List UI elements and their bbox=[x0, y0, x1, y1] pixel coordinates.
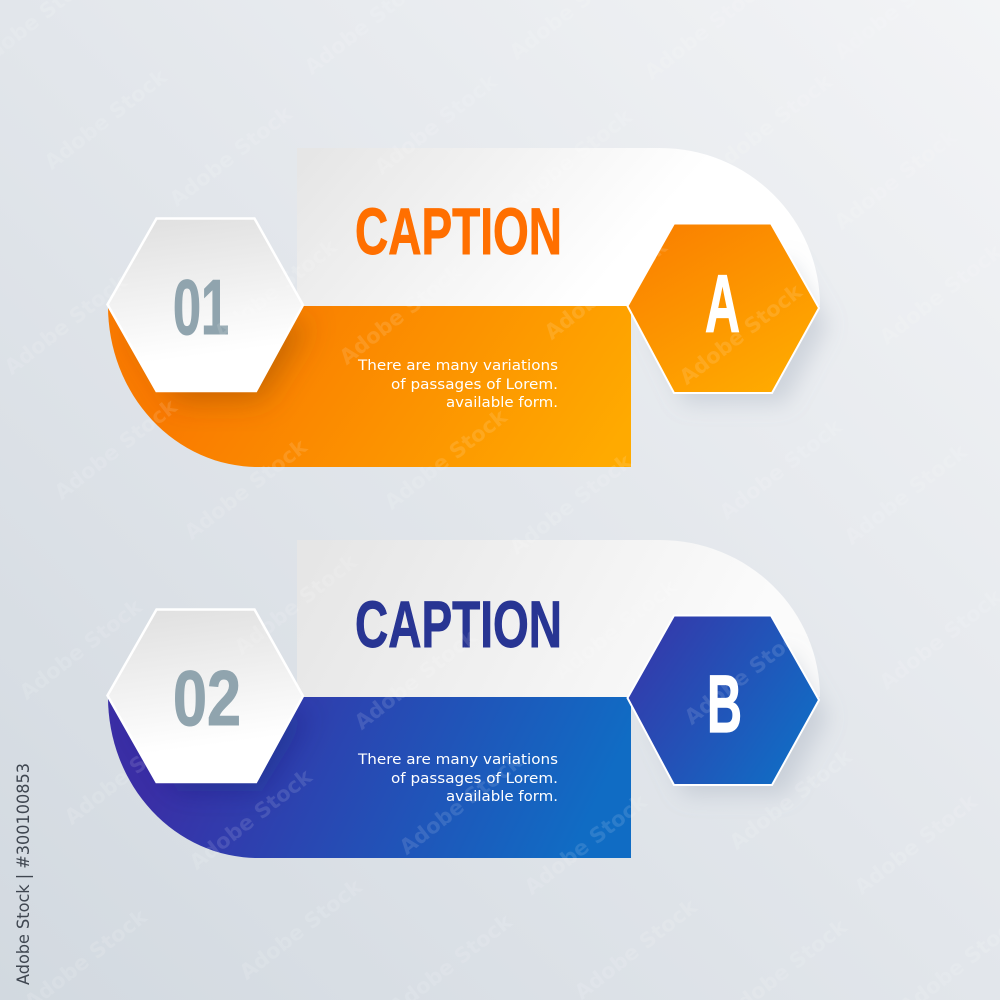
icon: hexagon B: B bbox=[707, 659, 742, 750]
icon: hexagon A bbox=[628, 224, 819, 393]
watermarks: Adobe Stock bbox=[520, 789, 652, 900]
watermarks: Adobe Stock bbox=[50, 394, 182, 505]
orange card bbox=[108, 306, 631, 467]
icon: hexagon 01: 01 bbox=[173, 263, 229, 351]
watermarks: Adobe Stock bbox=[335, 259, 467, 370]
watermarks: Adobe Stock bbox=[850, 789, 982, 900]
hexagon shadow left bbox=[172, 715, 301, 796]
hexagon shadow right bbox=[650, 260, 828, 403]
text block bbox=[357, 358, 558, 411]
text block bbox=[357, 752, 558, 805]
watermarks: Adobe Stock bbox=[395, 749, 527, 860]
hexagon shadow right bbox=[650, 652, 828, 795]
watermarks: Adobe Stock bbox=[370, 69, 502, 180]
panel: item 02 / B (blue) bbox=[108, 540, 828, 858]
icon: hexagon B bbox=[628, 616, 819, 785]
watermarks: Adobe Stock bbox=[505, 104, 637, 215]
watermarks: Adobe Stock bbox=[550, 574, 682, 685]
watermarks: Adobe Stock bbox=[15, 594, 147, 705]
watermarks: Adobe Stock bbox=[180, 434, 312, 545]
text block: of passages of Lorem. bbox=[391, 377, 558, 393]
icon: hexagon 02 bbox=[108, 610, 303, 782]
watermarks: Adobe Stock bbox=[680, 619, 812, 730]
panel: item 01 / A (orange) bbox=[108, 148, 828, 467]
watermarks: Adobe Stock bbox=[60, 719, 192, 830]
icon: hexagon 01 bbox=[108, 218, 303, 391]
white card bbox=[297, 540, 820, 697]
stock id label: Adobe Stock | #300100853 bbox=[14, 763, 34, 985]
text block: There are many variations bbox=[357, 752, 558, 768]
watermarks: Adobe Stock bbox=[40, 64, 172, 175]
watermarks: Adobe Stock bbox=[350, 624, 482, 735]
heading: caption: CAPTION bbox=[355, 587, 562, 661]
watermarks: Adobe Stock bbox=[230, 549, 362, 660]
text block: available form. bbox=[446, 789, 558, 805]
watermarks: Adobe Stock bbox=[830, 124, 962, 235]
watermarks: Adobe Stock bbox=[540, 234, 672, 345]
heading: caption: CAPTION bbox=[355, 194, 562, 268]
text block: available form. bbox=[446, 395, 558, 411]
watermarks: Adobe Stock bbox=[0, 269, 132, 380]
watermarks: Adobe Stock bbox=[840, 439, 972, 550]
watermarks: Adobe Stock bbox=[210, 234, 342, 345]
watermarks: Adobe Stock bbox=[705, 69, 837, 180]
watermarks: Adobe Stock bbox=[235, 874, 367, 985]
blue card bbox=[108, 697, 631, 858]
text block: of passages of Lorem. bbox=[391, 771, 558, 787]
watermarks: Adobe Stock bbox=[380, 404, 512, 515]
watermarks: Adobe Stock bbox=[505, 449, 637, 560]
icon: hexagon 02: 02 bbox=[173, 654, 241, 742]
icon: hexagon A: A bbox=[705, 259, 740, 350]
watermarks: Adobe Stock bbox=[185, 764, 317, 875]
hexagon shadow left bbox=[130, 322, 310, 400]
text block: There are many variations bbox=[357, 358, 558, 374]
watermarks: Adobe Stock bbox=[675, 279, 807, 390]
watermarks: Adobe Stock bbox=[725, 744, 857, 855]
watermarks: Adobe Stock bbox=[715, 414, 847, 525]
watermarks: Adobe Stock bbox=[165, 101, 297, 212]
white card bbox=[297, 148, 820, 306]
